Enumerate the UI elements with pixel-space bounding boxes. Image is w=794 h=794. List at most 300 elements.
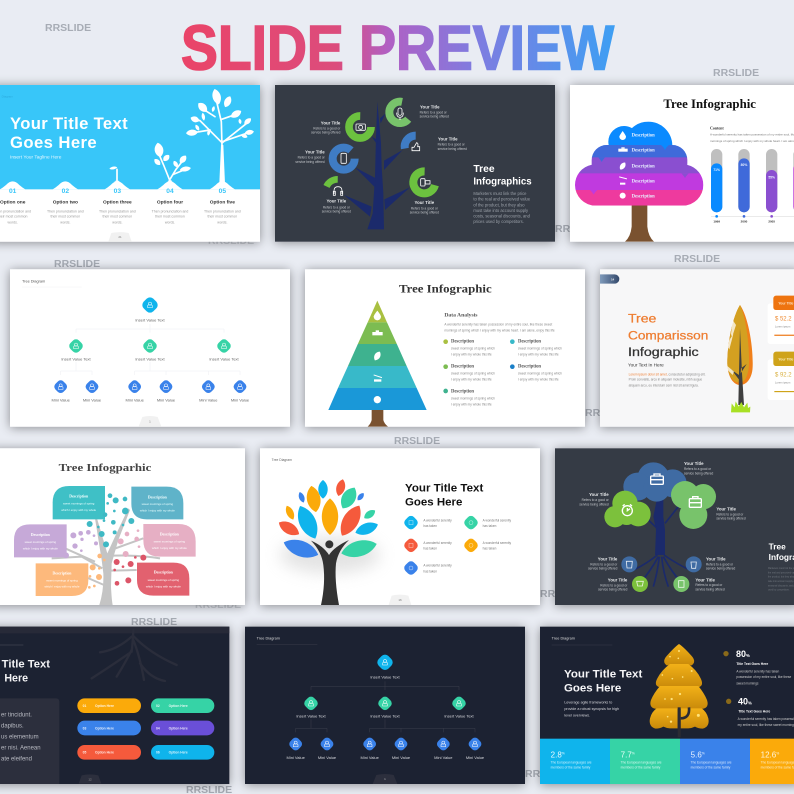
panel text xyxy=(1,713,41,762)
watermarks: RRSLIDE xyxy=(555,223,601,235)
panel text: er nisi. Aenean xyxy=(1,746,41,752)
option numbers xyxy=(9,188,226,195)
bubble: orange: which I enjoy with my whole xyxy=(45,585,80,589)
option pills: 03 xyxy=(83,726,87,730)
option descriptions xyxy=(0,210,241,224)
feature text xyxy=(423,518,512,573)
callout descriptions: service being offered xyxy=(716,517,746,521)
slide 12 heading: Your Title Text xyxy=(564,668,643,680)
tree callout descriptions: service being offered xyxy=(295,160,325,164)
ring: thumb xyxy=(403,134,428,159)
tree callout labels: Your Title xyxy=(327,199,347,204)
org chart labels: Mini Value xyxy=(157,397,176,402)
page tab xyxy=(373,774,397,784)
bubble: orange xyxy=(36,563,88,596)
crown labels: Description xyxy=(632,134,655,139)
option pills: 01 xyxy=(83,704,87,708)
slide 8 heading: Your Title Text xyxy=(405,483,484,495)
watermarks: RRSLIDE xyxy=(54,258,100,270)
slide 6 heading: Tree xyxy=(628,311,656,325)
bubble: lilac xyxy=(14,524,67,557)
number tab: 14 xyxy=(611,277,615,281)
bubble: teal xyxy=(53,486,105,519)
feature text: has taken xyxy=(483,547,497,551)
tree callout labels: Your Title xyxy=(420,104,440,109)
slide 2 body text xyxy=(473,191,531,224)
panel: slide 3 cloud tree with bars xyxy=(570,85,794,242)
stat tile: orange: % xyxy=(776,752,779,756)
legend headings: Description xyxy=(518,340,541,345)
icon: person trunk xyxy=(311,540,349,605)
page tab xyxy=(108,232,132,242)
tree callout descriptions: Refers to a good or xyxy=(313,126,340,130)
trunk xyxy=(368,410,388,427)
icon: roots and trunk xyxy=(630,497,693,587)
callout titles: Your Title xyxy=(716,506,736,511)
subtitle: Your Text In Here xyxy=(628,363,664,368)
root circles xyxy=(621,556,702,592)
slide 8 heading: Goes Here xyxy=(405,497,462,509)
page tab xyxy=(79,774,101,784)
legend headings: Description xyxy=(451,389,474,394)
stat 40 percent: 40% xyxy=(738,697,752,707)
option pills: 06 xyxy=(156,751,160,755)
crown icons xyxy=(618,131,628,199)
option numbers: 01 xyxy=(9,188,17,195)
option numbers: 02 xyxy=(62,188,69,195)
bubble: blue: which I enjoy with my whole xyxy=(140,508,175,512)
content text xyxy=(710,125,794,143)
tree callout labels xyxy=(305,104,458,205)
slide 12 heading xyxy=(564,668,643,694)
bubble: pink: which I enjoy with my whole xyxy=(152,546,187,550)
price card 2: Lorem ipsum xyxy=(775,381,791,385)
ring: chart xyxy=(411,169,438,196)
title: SLIDE PREVIEW xyxy=(181,14,614,84)
option numbers: 05 xyxy=(219,188,226,195)
callout titles: Your Title xyxy=(706,557,726,562)
option pills: 02 xyxy=(156,704,160,708)
org chart labels xyxy=(52,317,250,402)
org chart labels xyxy=(287,675,485,760)
slide 8 label: Tree Diagram xyxy=(272,458,292,462)
slide 9 heading: Tree xyxy=(769,541,786,551)
callout descriptions: Refers to a good or xyxy=(716,512,743,516)
slide 6 body: aliquam arcu, eu interdum sem nisl sit amet ligula. xyxy=(629,383,699,387)
panel: slide 9 dark cloud tree xyxy=(555,448,794,605)
bar chart: 2000 xyxy=(741,219,748,223)
crown drips xyxy=(590,145,689,195)
icon: faint roots xyxy=(92,630,177,681)
slide 7 heading: Tree Infogparhic xyxy=(59,462,151,474)
stat 80 percent: Title Text Goes Here xyxy=(736,662,768,666)
panel: slide 4 light tree diagram xyxy=(10,269,290,427)
price card 1 xyxy=(768,296,794,344)
bubble: pink: Description xyxy=(160,533,180,537)
org chart labels: Insert Value Text xyxy=(135,317,166,322)
slide 10 heading: Title Text xyxy=(2,659,50,671)
slide 3 heading: Tree Infographic xyxy=(663,97,756,111)
stat tile: blue: The European languages are xyxy=(691,760,732,764)
feature text: has taken xyxy=(423,547,437,551)
stat tile: blue: 5.6 xyxy=(691,750,702,759)
bubble: red xyxy=(137,563,189,596)
pyramid icons xyxy=(372,311,383,403)
slide 8 heading xyxy=(405,483,484,509)
callout descriptions: Refers to a good or xyxy=(684,467,711,471)
org chart labels: Insert Value Text xyxy=(444,714,475,719)
stat tile: cyan: 2.8 xyxy=(551,750,562,759)
ring: mic xyxy=(385,97,415,127)
org chart labels: Insert Value Text xyxy=(370,714,401,719)
panel text: er tincidunt. xyxy=(1,713,32,719)
slide 6 body xyxy=(629,372,706,387)
slide 1 heading xyxy=(10,114,128,152)
stat 40 percent xyxy=(738,697,794,727)
data analysis text: mornings of spring which I enjoy with my whole heart. I am alone, enjoy this life xyxy=(444,329,555,333)
slide 5 heading: Tree Infographic xyxy=(399,281,492,295)
stat 80 percent xyxy=(736,649,791,685)
slide 12 body: level overviews. xyxy=(564,713,590,717)
option pills: Option Here xyxy=(95,704,114,708)
content text: mornings of spring which I enjoy with my whole heart. I am alone xyxy=(710,139,794,143)
panel text: us elementum xyxy=(1,735,39,741)
panel text: ate eleifend xyxy=(1,756,32,762)
org chart labels: Mini Value xyxy=(126,397,145,402)
watermarks: RRSLIDE xyxy=(131,616,177,628)
org chart nodes xyxy=(53,295,248,395)
stat 80 percent: sweet mornings xyxy=(736,681,759,685)
slide 2 heading: Infographics xyxy=(473,177,532,188)
stat tile: cyan: members of the same family xyxy=(551,765,591,769)
org chart labels: Mini Value xyxy=(434,755,453,760)
legend descriptions: sweet mornings of spring which xyxy=(451,346,495,350)
tree callout descriptions: Refers to a good or xyxy=(420,110,447,114)
watermarks: RRSLIDE xyxy=(525,768,571,780)
feature text: has taken xyxy=(423,524,437,528)
slide 10 heading: Here xyxy=(4,673,28,685)
tree callout descriptions: service being offered xyxy=(322,210,351,214)
slide 9 heading xyxy=(769,541,794,562)
callout titles: Your Title xyxy=(608,578,628,583)
org chart labels: Mini Value xyxy=(318,755,337,760)
bubble: red: which I enjoy with my whole xyxy=(146,584,181,588)
feature text: A wonderful serenity xyxy=(423,518,452,522)
option descriptions: their most common xyxy=(155,215,185,219)
option labels: Option three xyxy=(103,200,132,206)
crown labels: Description xyxy=(632,194,655,199)
org chart labels: Insert Value Text xyxy=(296,714,327,719)
feature text: has taken xyxy=(423,569,437,573)
watermarks: RRSLIDE xyxy=(713,67,759,79)
crown labels xyxy=(632,134,655,199)
stat tile: blue: members of the same family xyxy=(691,765,731,769)
page tab xyxy=(389,595,411,605)
data analysis text: Data Analysis xyxy=(444,313,478,319)
option pills: Option Here xyxy=(95,726,114,730)
stat tile: blue: % xyxy=(702,752,705,756)
option descriptions: words. xyxy=(8,220,18,224)
slide 4 heading: Tree Diagram xyxy=(22,279,45,283)
org chart labels: Insert Value Text xyxy=(135,356,166,361)
option labels: Option four xyxy=(157,200,183,206)
slide 2 heading: Tree xyxy=(473,164,495,175)
org chart labels: Mini Value xyxy=(466,755,485,760)
org chart labels: Insert Value Text xyxy=(209,356,240,361)
trunk xyxy=(625,205,654,242)
tree callout descriptions: Refers to a good or xyxy=(323,205,350,209)
watermarks: RRSLIDE xyxy=(394,435,440,447)
org chart labels: Mini Value xyxy=(392,755,411,760)
option descriptions: words. xyxy=(217,220,227,224)
option descriptions: words. xyxy=(60,220,70,224)
panel: slide 2 dark tree infographics xyxy=(275,85,555,242)
slide 1 tagline: Insert Your Tagline Here xyxy=(10,155,62,161)
org chart labels: Insert Value Text xyxy=(61,356,92,361)
slide 6 heading: Infographic xyxy=(628,345,699,359)
feature text: A wonderful serenity xyxy=(483,541,512,545)
slide 12 heading: Goes Here xyxy=(564,682,621,694)
panel: slide 1 blue title with growing tree xyxy=(0,85,260,242)
stat tile: cyan: The European languages are xyxy=(551,760,592,764)
icon: navy tree xyxy=(344,102,410,229)
stat tile: blue xyxy=(680,739,750,784)
option descriptions: words. xyxy=(112,220,122,224)
tree callout descriptions: Refers to a good or xyxy=(411,207,438,211)
callout descriptions: service being offered xyxy=(706,567,735,571)
legend descriptions: sweet mornings of spring which xyxy=(518,346,562,350)
slide 6 body: Proin convallis, arcu in aliquam molestie, nibh augue xyxy=(629,378,702,382)
panel: slide 12 gold tree with stats xyxy=(540,627,794,784)
tree callout descriptions: Refers to a good or xyxy=(438,143,465,147)
bar chart: 2005 xyxy=(768,219,775,223)
watermarks: RRSLIDE xyxy=(208,235,254,247)
org chart labels: Mini Value xyxy=(52,397,71,402)
bubble: blue: sweet mornings of spring xyxy=(142,502,173,506)
price card 2 xyxy=(768,352,794,400)
org chart labels: Mini Value xyxy=(231,397,250,402)
text panel xyxy=(0,698,59,784)
slide 9 body: used by competitors. xyxy=(768,589,790,592)
page tab: 21 xyxy=(118,235,122,239)
bar chart: 1999 xyxy=(713,219,720,223)
price card 1: $ 52.2 xyxy=(775,316,792,322)
legend headings: Description xyxy=(451,365,474,370)
tree callout descriptions: service being offered xyxy=(438,147,467,151)
panel: slide 6 tree comparison xyxy=(600,269,794,427)
callout descriptions: service being offered xyxy=(579,502,609,506)
callout descriptions: service being offered xyxy=(695,587,725,591)
org chart nodes xyxy=(288,653,483,752)
watermarks: RRSLIDE xyxy=(585,407,631,419)
callout titles xyxy=(589,461,736,583)
option descriptions: their most common xyxy=(208,215,237,219)
bubble: blue xyxy=(131,487,183,519)
stat tile: cyan xyxy=(540,739,610,784)
legend headings: Description xyxy=(518,365,541,370)
crown labels: Description xyxy=(632,164,655,169)
stat markers xyxy=(723,651,731,704)
tree callout labels: Your Title xyxy=(415,200,435,205)
icon: growing tree xyxy=(109,88,254,183)
option labels: Option five xyxy=(210,200,235,206)
callout titles: Your Title xyxy=(695,577,715,582)
icon: leaves xyxy=(276,478,380,562)
icon: gray tree xyxy=(52,508,160,605)
legend descriptions: sweet mornings of spring which xyxy=(518,372,562,376)
ring: headphones xyxy=(321,175,354,208)
org chart labels: Mini Value xyxy=(199,397,218,402)
slide 12 body: provide a robust synopsis for high xyxy=(564,707,619,711)
tree dots xyxy=(63,493,146,589)
org chart labels: Mini Value xyxy=(83,397,102,402)
feature text: A wonderful serenity xyxy=(483,518,512,522)
stat tile: green: members of the same family xyxy=(621,765,661,769)
tree callout descriptions: service being offered xyxy=(311,131,341,135)
ring: camera xyxy=(349,116,371,138)
icon: autumn tree xyxy=(727,305,753,412)
callout descriptions: Refers to a good or xyxy=(582,498,609,502)
option descriptions: Then pronunciation and xyxy=(152,210,188,214)
pyramid tree xyxy=(328,301,427,410)
bubble: red: Description xyxy=(154,571,174,575)
stat tile: orange xyxy=(750,739,794,784)
bar chart: 55% xyxy=(768,175,775,179)
stat tile: orange: 12.6 xyxy=(761,750,776,759)
legend descriptions: sweet mornings of spring which xyxy=(451,372,495,376)
icon: gold tree xyxy=(650,644,709,737)
stat tile: cyan: % xyxy=(562,752,565,756)
legend bullets xyxy=(443,339,515,393)
bubble: orange: Description xyxy=(53,571,72,575)
page tab: 1 xyxy=(149,419,151,423)
slide 2 heading xyxy=(473,164,532,188)
stat tile: green: 7.7 xyxy=(621,750,632,759)
option descriptions: Then pronunciation and xyxy=(47,210,84,214)
org chart labels: Insert Value Text xyxy=(370,675,401,680)
callout descriptions: service being offered xyxy=(588,567,618,571)
price card 1: Lorem ipsum xyxy=(775,325,791,329)
tree callout labels: Your Title xyxy=(305,150,325,155)
price card 2: Your Title xyxy=(778,357,794,361)
legend descriptions: I enjoy with my whole this life xyxy=(451,378,492,382)
option descriptions: their most common xyxy=(51,215,80,219)
panel: slide 8 colorful person tree xyxy=(260,448,540,605)
tree callout labels: Your Title xyxy=(321,120,341,125)
content text: Content xyxy=(710,125,724,130)
ring icons xyxy=(333,108,430,195)
stat tile: green: % xyxy=(632,752,635,756)
option labels: Option one xyxy=(0,200,26,206)
bar chart: 71% xyxy=(713,168,720,172)
panel: slide 1 blue title with growing tree: Diagram xyxy=(2,94,13,98)
slide 10 heading xyxy=(2,659,50,685)
ring: phone xyxy=(333,148,355,170)
bubble: teal: sweet mornings of spring xyxy=(63,502,95,506)
stat 80 percent: 80% xyxy=(736,649,750,659)
crown labels: Description xyxy=(632,149,655,154)
slide 1 heading: Your Title Text xyxy=(10,114,128,133)
panel text: dapibus. xyxy=(1,724,24,730)
option pills: 04 xyxy=(156,726,160,730)
legend descriptions: I enjoy with my whole this life xyxy=(518,353,559,357)
slide 2 body text: prices used by competitors. xyxy=(473,219,524,224)
option descriptions: Then pronunciation and xyxy=(204,210,241,214)
stat tile: green: The European languages are xyxy=(621,760,662,764)
tree callout descriptions: Refers to a good or xyxy=(298,156,325,160)
tree callout descriptions xyxy=(295,110,467,215)
number tab xyxy=(600,274,619,284)
stat 80 percent: A wonderful serenity has taken xyxy=(736,669,780,673)
panel: slide 11 dark tree diagram xyxy=(245,627,525,784)
option bumps xyxy=(0,181,235,189)
bubble: teal: which I enjoy with my whole xyxy=(61,508,97,512)
slide 12 body: Leverage agile frameworks to xyxy=(564,701,612,705)
callout titles: Your Title xyxy=(684,461,704,466)
legend headings xyxy=(451,340,541,394)
page tab: 16 xyxy=(398,598,402,602)
watermarks: RRSLIDE xyxy=(674,253,720,265)
callout descriptions: service being offered xyxy=(598,588,628,592)
cloud: green right xyxy=(671,481,716,529)
page tab xyxy=(139,416,161,427)
slide 2 body text: costs, seasonal discounts, and xyxy=(473,214,531,219)
feature text: A wonderful serenity xyxy=(423,564,452,568)
layered tree crown xyxy=(573,120,707,206)
bubble: lilac: which I enjoy with my whole xyxy=(23,546,58,550)
legend descriptions: I enjoy with my whole this life xyxy=(451,353,492,357)
page tab: 12 xyxy=(88,778,92,782)
crown labels: Description xyxy=(632,179,655,184)
bubble: lilac: Description xyxy=(31,533,51,537)
bubble: blue: Description xyxy=(148,495,168,499)
option numbers: 04 xyxy=(166,188,174,195)
callout descriptions: Refers to a good or xyxy=(695,583,722,587)
data analysis text xyxy=(444,313,555,333)
watermarks: RRSLIDE xyxy=(540,588,586,600)
callout descriptions: Refers to a good or xyxy=(600,583,627,587)
bar chart: 80% xyxy=(741,163,747,167)
bubble: teal: Description xyxy=(69,495,89,499)
feature text: A wonderful serenity xyxy=(423,541,452,545)
panel: slide 7 tree with speech bubbles xyxy=(0,448,245,605)
cloud: blue xyxy=(623,462,687,502)
slide 9 body xyxy=(768,567,794,592)
org chart labels: Mini Value xyxy=(361,755,380,760)
price card 1: Your Title xyxy=(778,301,794,305)
callout descriptions: Refers to a good or xyxy=(590,562,617,566)
slide 6 heading: Comparisson xyxy=(628,328,708,342)
slide 2 body text: must take into account supply xyxy=(473,208,529,213)
legend headings: Description xyxy=(451,340,474,345)
panel: slide 10 dark options xyxy=(0,627,229,784)
data analysis text: A wonderful serenity has taken possession of my entire soul, like these sweet xyxy=(444,322,552,326)
tree callout descriptions: service being offered xyxy=(420,115,449,119)
panel: slide 5 pyramid tree xyxy=(305,269,585,427)
slide 6 body: Lorem ipsum dolor sit amet, consectetur adipiscing elit. xyxy=(629,372,706,376)
stat 80 percent: possession of my entire soul, like these xyxy=(736,675,791,679)
option labels: Option two xyxy=(53,200,78,206)
callout descriptions: service being offered xyxy=(684,471,713,475)
bubble: pink xyxy=(143,524,196,557)
legend descriptions: I enjoy with my whole this life xyxy=(451,402,492,406)
bubble: red: sweet mornings of spring xyxy=(148,578,179,582)
page tab: 1 xyxy=(384,777,386,781)
option pills: Option Here xyxy=(169,726,188,730)
slide 12 label: Tree Diagram xyxy=(552,637,575,641)
option labels xyxy=(0,200,235,206)
slide 2 body text: of the product, but they also xyxy=(473,202,525,207)
